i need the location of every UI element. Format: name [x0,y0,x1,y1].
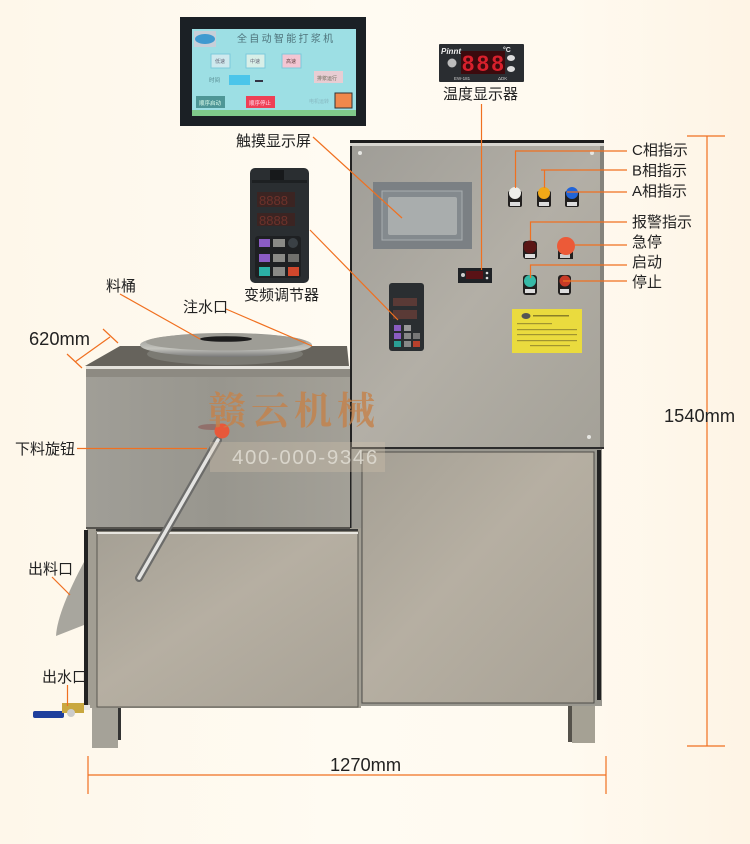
outlet chute [56,562,84,636]
indicator lamps [508,187,579,295]
label: touch screen: 触摸显示屏 [236,133,311,150]
lower left cabinet [84,528,361,708]
inverter keypad on cabinet [389,283,424,351]
label: emergency stop: 急停 [632,234,662,251]
label: barrel: 料桶 [106,278,136,295]
temperature display popup: Pinnt [441,47,461,56]
watermark [208,380,385,472]
label: alarm: 报警指示 [632,214,692,231]
temperature display popup: EW-181 [454,76,471,81]
touch screen popup: 顺序停止 [249,99,272,107]
temperature display popup [439,44,524,82]
hopper lid [140,333,312,365]
thermostat on cabinet [458,268,492,283]
hopper box [85,346,352,529]
label: C phase: C相指示 [632,142,688,159]
orange leader lines [52,104,627,706]
label: water outlet: 出水口 [42,669,87,686]
temperature display popup: ΔDK [498,76,507,81]
touch screen popup: 高速 [286,58,296,65]
label: 1270mm: 1270mm [330,754,401,775]
lever with red knob [139,424,230,578]
drain valve [33,703,90,718]
height dimension [687,136,725,746]
yellow nameplate [512,309,582,353]
touch screen popup: 中速 [250,58,260,65]
label: 620mm: 620mm [29,328,90,349]
temperature display popup: °C [503,46,511,54]
inverter popup: 8888 [259,193,288,208]
label: discharge: 出料口 [28,561,73,578]
touch panel on cabinet [373,182,472,249]
width dimension [88,756,606,794]
watermark brand: 赣云机械 [208,380,380,435]
label: water inlet: 注水口 [183,299,228,316]
label: B phase: B相指示 [632,162,687,180]
label: 1540mm: 1540mm [664,405,735,426]
touch screen popup [180,17,366,126]
touch screen popup: 时间 [209,76,220,84]
inverter popup [250,168,309,283]
label: start: 启动 [632,254,662,271]
lower right cabinet [350,449,602,706]
machine body [33,140,604,748]
watermark phone: 400-000-9346 [232,446,379,469]
touch screen popup: 电机运转 [309,98,329,105]
label: stop: 停止 [632,274,662,291]
touch screen popup: 排浆运行 [317,75,337,82]
inverter popup: 8888 [259,213,288,228]
upper control cabinet [350,140,604,449]
temperature display popup: 888 [462,51,506,76]
watermark phone [210,442,385,472]
label: inverter: 变频调节器 [244,287,319,304]
legs [92,702,595,748]
touch screen popup: 全自动智能打浆机 [237,32,335,45]
label: temperature display: 温度显示器 [443,86,518,103]
touch screen popup: 低速 [215,58,225,65]
touch screen popup: 顺序启动 [199,99,222,107]
label: A phase: A相指示 [632,183,687,200]
labels [15,86,735,775]
label: feed knob: 下料旋钮 [15,441,75,458]
